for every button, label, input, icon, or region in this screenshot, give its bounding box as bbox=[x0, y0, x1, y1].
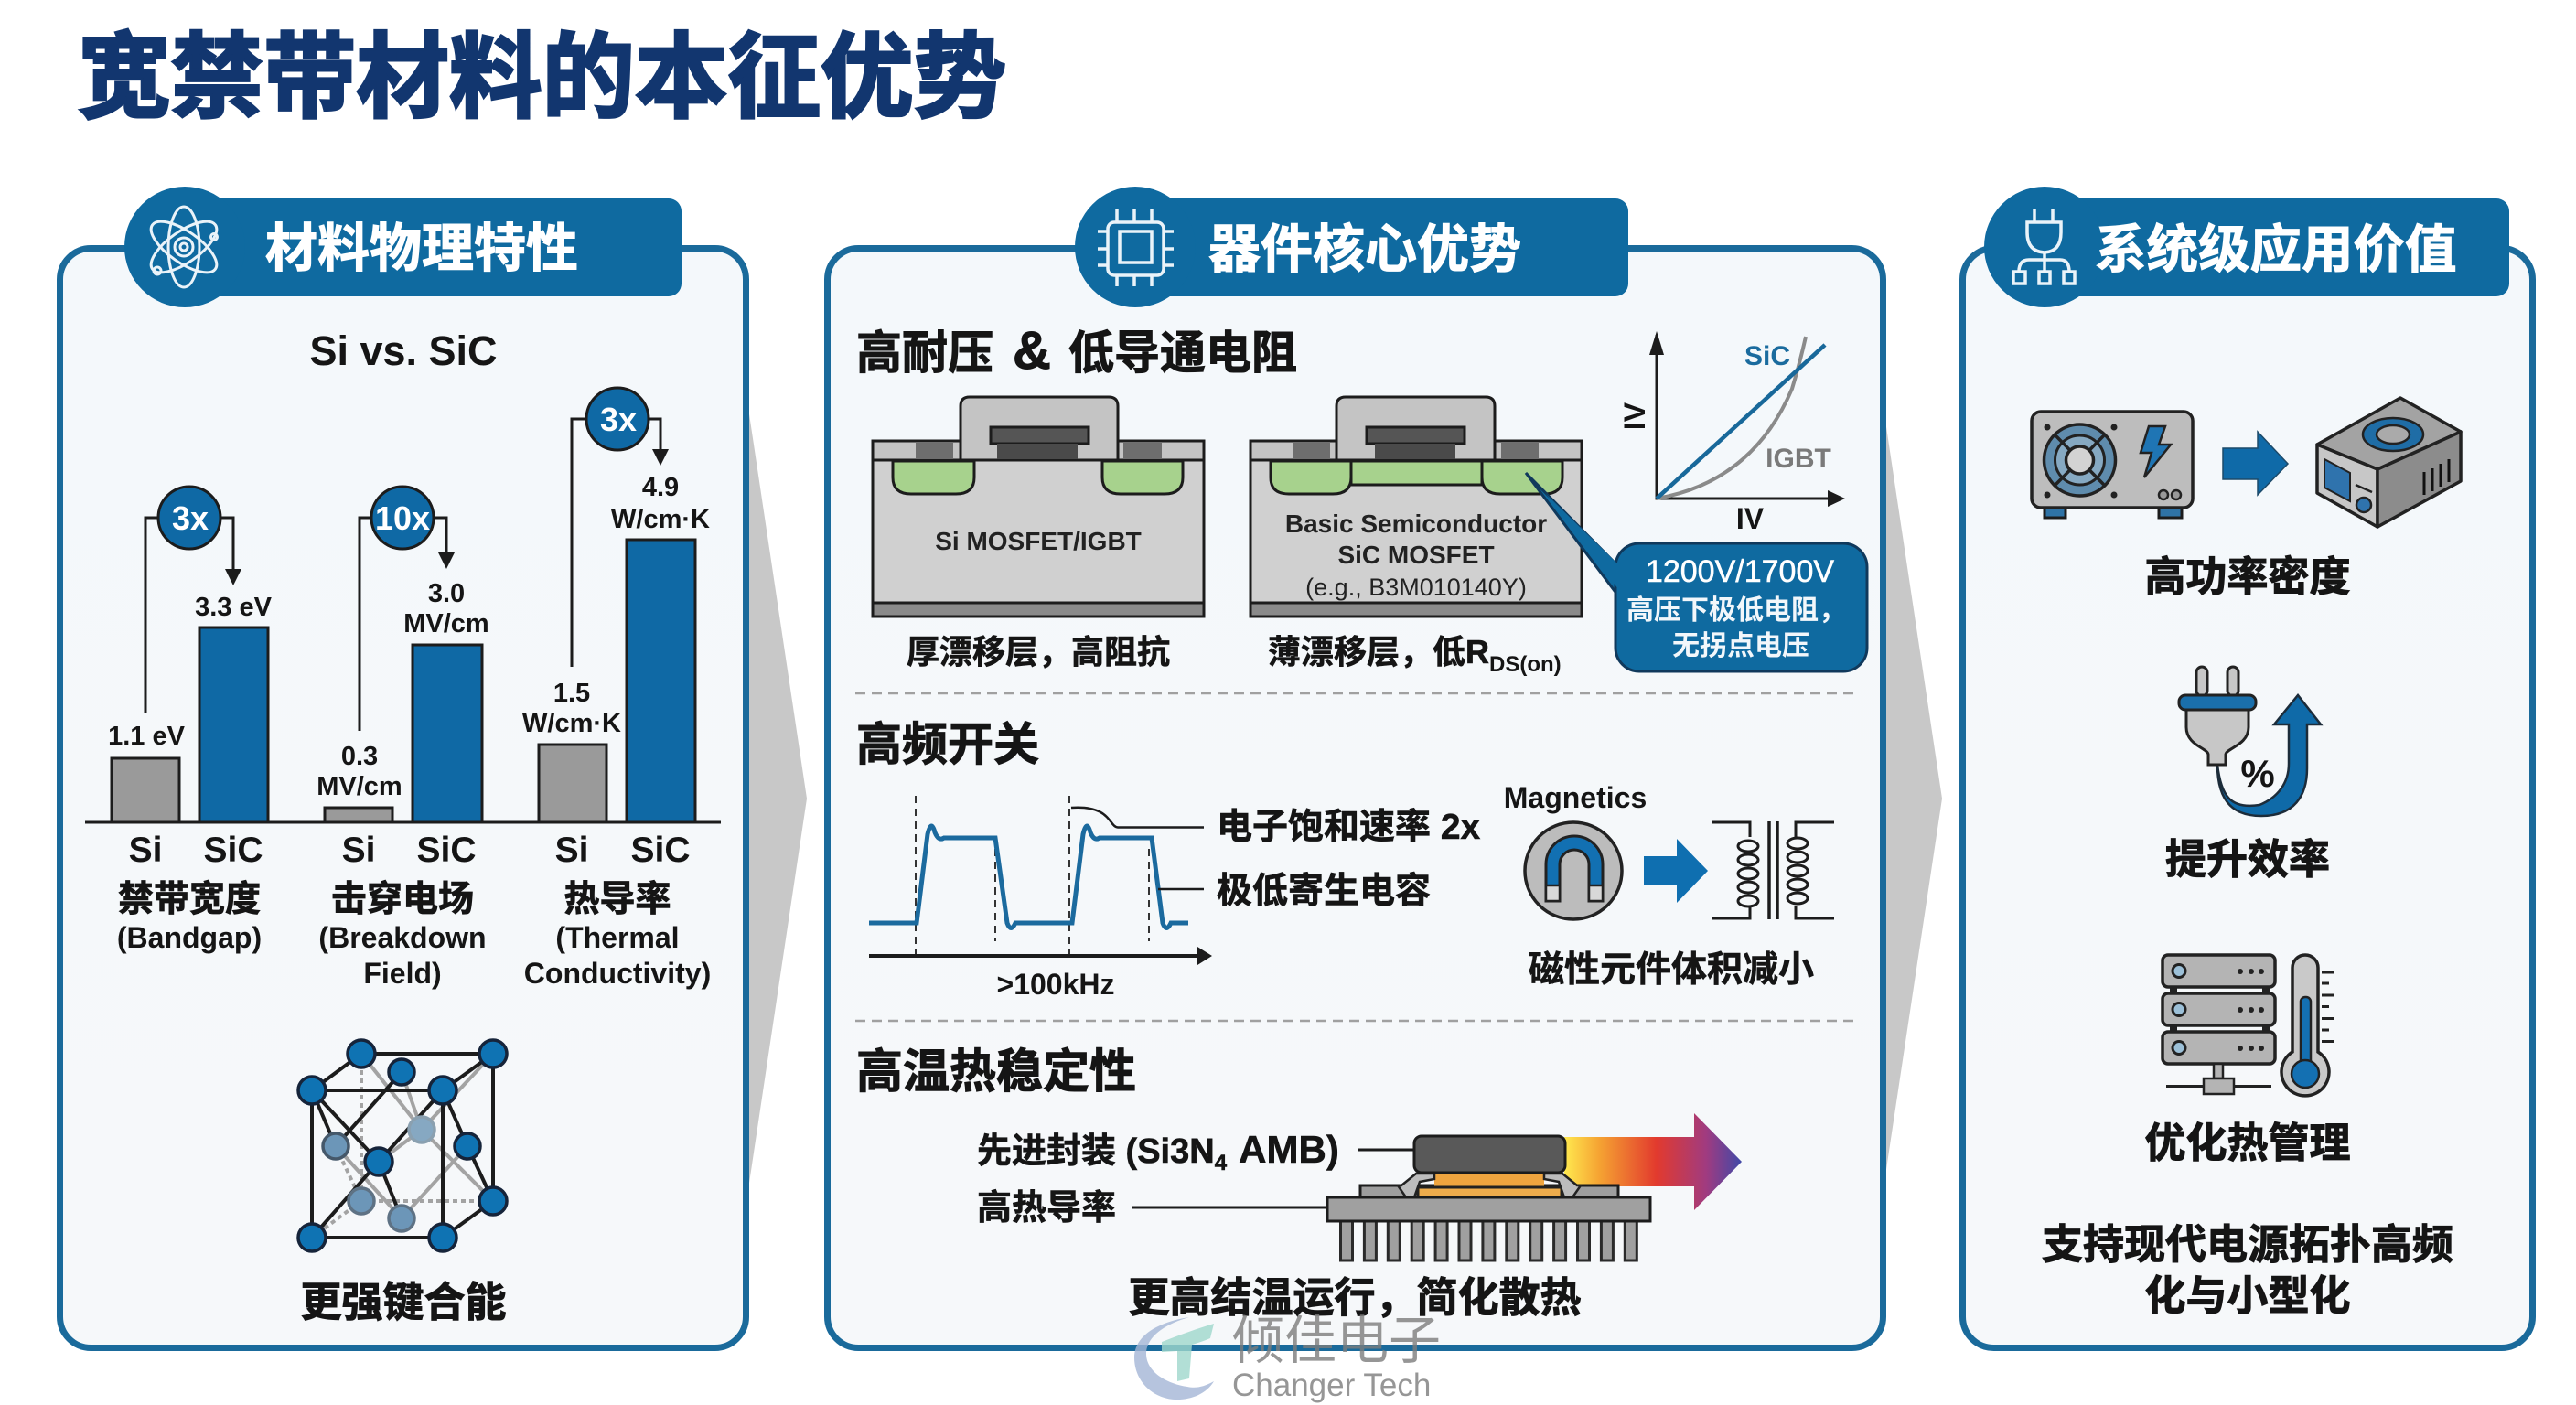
bar chart: 3x bbox=[600, 401, 637, 438]
label: high thermal conductivity: 高热导率 bbox=[977, 1189, 1116, 1228]
icon: bulky power supply bbox=[2032, 412, 2193, 518]
chart: switching waveform bbox=[869, 796, 1212, 1001]
icon: plug with efficiency arrow: % bbox=[2240, 752, 2275, 795]
icon: plug with efficiency arrow bbox=[2179, 667, 2321, 816]
icon: chip bbox=[1098, 209, 1174, 286]
bar chart: 热导率 bbox=[564, 880, 671, 919]
heading: high temperature stability: 高温热稳定性 bbox=[856, 1046, 1136, 1098]
bar chart bbox=[85, 388, 721, 990]
label: electron saturation velocity: 电子饱和速率 2x bbox=[1217, 808, 1481, 847]
icon: magnet bbox=[1525, 822, 1622, 919]
title: 宽禁带材料的本征优势 bbox=[78, 26, 1006, 130]
chart: IV curves: IV bbox=[1618, 402, 1651, 430]
bar chart: 4.9 bbox=[642, 473, 679, 502]
heading: high voltage and low resistance: 低导通电阻 bbox=[1068, 327, 1297, 379]
bar chart: Si bbox=[342, 831, 375, 870]
watermark: Changer Tech logo: Changer Tech bbox=[1232, 1367, 1431, 1403]
diagram: SiC MOSFET cross section: Basic Semiconductor bbox=[1285, 509, 1547, 538]
arrow: power density bbox=[2223, 432, 2288, 495]
label: low parasitic capacitance: 极低寄生电容 bbox=[1217, 872, 1431, 911]
label: advanced package: 4 bbox=[1215, 1151, 1228, 1175]
caption: thin drift layer: DS(on) bbox=[1489, 652, 1562, 677]
caption: higher junction temperature: 更高结温运行，简化散热 bbox=[1128, 1274, 1582, 1321]
watermark: Changer Tech logo bbox=[1134, 1312, 1441, 1403]
label: thermal management: 优化热管理 bbox=[2144, 1120, 2351, 1166]
bar chart: MV/cm bbox=[317, 772, 402, 801]
label: magnetics: Magnetics bbox=[1504, 781, 1647, 814]
diagram: SiC MOSFET cross section: (e.g., B3M010140Y) bbox=[1305, 574, 1527, 601]
bar chart: 10x bbox=[375, 499, 430, 537]
bar chart: 0.3 bbox=[341, 742, 378, 771]
diagram: SiC MOSFET cross section bbox=[1250, 397, 1582, 617]
icon: compact power supply bbox=[2317, 398, 2461, 527]
arrow: panel one to panel two bbox=[746, 390, 807, 1207]
label: improved efficiency: 提升效率 bbox=[2165, 836, 2330, 883]
bar chart: W/cm·K bbox=[611, 505, 710, 534]
heading: high frequency switching: 高频开关 bbox=[856, 719, 1039, 770]
header label: 器件核心优势 bbox=[1208, 220, 1521, 279]
bar chart: Field) bbox=[363, 957, 442, 990]
bar chart: 3.0 bbox=[428, 579, 465, 608]
panel: material properties bbox=[60, 187, 746, 1348]
caption: smaller magnetics: 磁性元件体积减小 bbox=[1529, 950, 1814, 990]
icon: transformer bbox=[1712, 821, 1834, 919]
callout: 1200V/1700V bbox=[1526, 473, 1867, 671]
bar chart: 3.3 eV bbox=[195, 593, 273, 622]
icon: server and thermometer bbox=[2163, 955, 2334, 1096]
diagram: SiC MOSFET cross section: SiC MOSFET bbox=[1337, 541, 1495, 569]
subtitle: Si vs. SiC bbox=[309, 327, 498, 374]
icon: SiC crystal lattice bbox=[298, 1040, 507, 1251]
bar chart: (Thermal bbox=[555, 921, 680, 954]
bar chart: 3x bbox=[172, 499, 209, 537]
label: advanced package: AMB) bbox=[1229, 1128, 1339, 1171]
arrow: magnet to transformer bbox=[1644, 839, 1708, 903]
callout: 1200V/1700V: 1200V/1700V bbox=[1646, 554, 1834, 589]
bar chart: SiC bbox=[416, 831, 477, 870]
summary text: 支持现代电源拓扑高频 bbox=[2042, 1221, 2453, 1268]
chart: IV curves: SiC bbox=[1744, 341, 1790, 371]
chart: IV curves: IV bbox=[1736, 502, 1765, 535]
bar chart: W/cm·K bbox=[522, 709, 621, 738]
bar chart: (Breakdown bbox=[318, 921, 487, 954]
bar chart: 1.1 eV bbox=[108, 722, 186, 751]
bar chart: Si bbox=[555, 831, 588, 870]
icon: plug network bbox=[2013, 209, 2075, 284]
bar chart: 禁带宽度 bbox=[118, 880, 261, 919]
bar chart: 1.5 bbox=[553, 679, 590, 708]
bar chart: 击穿电场 bbox=[331, 880, 474, 919]
watermark: Changer Tech logo: 倾佳电子 bbox=[1232, 1312, 1441, 1370]
panel header: device advantages bbox=[1075, 187, 1628, 307]
chart: switching waveform: >100kHz bbox=[997, 968, 1114, 1001]
summary text bbox=[2042, 1221, 2453, 1319]
bar chart: (Bandgap) bbox=[117, 921, 262, 954]
diagram: Si MOSFET cross section bbox=[873, 397, 1204, 617]
bar chart: MV/cm bbox=[403, 609, 489, 638]
panel header: material properties bbox=[124, 187, 682, 307]
callout: 1200V/1700V: 无拐点电压 bbox=[1672, 631, 1809, 661]
chart: IV curves: IGBT bbox=[1766, 444, 1831, 474]
panel header: system value bbox=[1984, 187, 2509, 307]
label: power density: 高功率密度 bbox=[2144, 553, 2351, 600]
chart: IV curves bbox=[1618, 331, 1845, 535]
arrow: panel two to panel three bbox=[1880, 384, 1942, 1212]
caption: thick drift layer: 厚漂移层，高阻抗 bbox=[907, 633, 1170, 670]
heading: high voltage and low resistance: & bbox=[1013, 321, 1051, 381]
panel: system value bbox=[1963, 187, 2532, 1348]
panel: device advantages bbox=[827, 187, 1883, 1348]
caption: thin drift layer: 薄漂移层，低R bbox=[1268, 633, 1489, 670]
bar chart: Conductivity) bbox=[524, 957, 711, 990]
heading: high voltage and low resistance: 高耐压 bbox=[856, 327, 993, 379]
header label: 系统级应用价值 bbox=[2095, 220, 2457, 278]
bar chart: Si bbox=[129, 831, 162, 870]
bar chart: SiC bbox=[630, 831, 691, 870]
icon: atom bbox=[144, 207, 224, 287]
diagram: power package with heat sink bbox=[1132, 1113, 1742, 1260]
diagram: Si MOSFET cross section: Si MOSFET/IGBT bbox=[935, 527, 1142, 555]
caption: bond energy: 更强键合能 bbox=[300, 1279, 507, 1325]
summary text: 化与小型化 bbox=[2144, 1272, 2351, 1319]
bar chart: SiC bbox=[203, 831, 263, 870]
header label: 材料物理特性 bbox=[265, 220, 578, 278]
label: advanced package: 先进封装 (Si3N bbox=[977, 1132, 1215, 1171]
callout: 1200V/1700V: 高压下极低电阻， bbox=[1626, 595, 1846, 626]
